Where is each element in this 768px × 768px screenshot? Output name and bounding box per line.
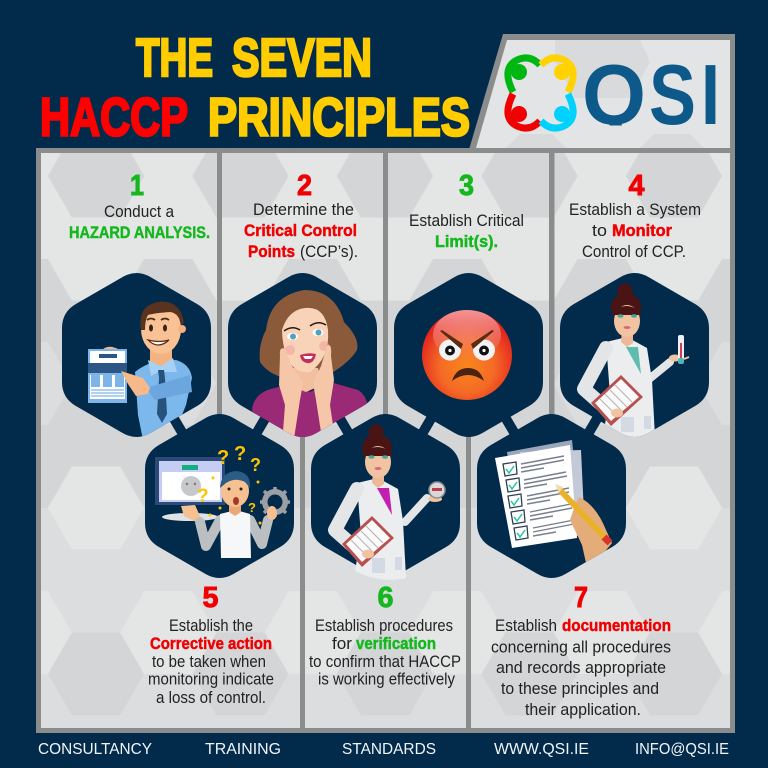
monitor — [155, 457, 225, 505]
document held by man — [88, 347, 127, 403]
title: HACCP — [40, 88, 188, 148]
principle 6 text: is working effectively — [318, 670, 455, 688]
footer: WWW.QSI.IE — [494, 741, 589, 758]
principle 2 text: Critical Control — [244, 221, 357, 240]
principle 1 text: HAZARD ANALYSIS. — [69, 223, 210, 242]
logo wordmark: Q — [582, 48, 646, 143]
doctor's coat — [355, 478, 406, 580]
footer: STANDARDS — [342, 741, 436, 758]
question marks: ? — [234, 443, 246, 465]
principle 5 text: 5 — [202, 582, 219, 614]
logo: four people ring — [508, 58, 573, 128]
man's pointing arm — [121, 371, 192, 400]
check marks — [506, 466, 525, 537]
hexagon 3: angry emoji — [394, 273, 543, 437]
principle 7 text: Establish — [495, 616, 557, 635]
logo wordmark — [585, 64, 716, 126]
question marks: ? — [248, 500, 256, 515]
hexagon 1: man holding document — [62, 273, 211, 440]
confused man's shirt — [220, 510, 251, 558]
doctor's teal shirt — [626, 347, 641, 374]
doctor's hand on clipboard — [611, 408, 623, 418]
footer — [38, 741, 729, 758]
angry mouth — [452, 368, 484, 381]
footer: CONSULTANCY — [38, 741, 152, 758]
man's tie — [157, 370, 167, 423]
doctor's neck and head — [611, 284, 641, 347]
question marks: ? — [197, 486, 209, 507]
question marks: ? — [250, 455, 261, 475]
angry eyebrows — [440, 330, 494, 349]
principle 6 text: verification — [356, 634, 436, 653]
man's face details — [147, 318, 169, 345]
checklist page — [495, 445, 577, 548]
doctor's pockets — [621, 416, 651, 432]
principle 7 text: 7 — [574, 582, 588, 614]
logo person: cyan — [541, 94, 573, 128]
gear — [260, 487, 290, 517]
plate under monitor — [162, 513, 218, 521]
doctor's hand on clipboard — [362, 550, 374, 558]
principle 5 text: a loss of control. — [156, 688, 266, 707]
hexagon 2: surprised woman — [228, 273, 377, 445]
woman's centre top stripe — [295, 400, 319, 437]
logo person: green — [508, 58, 540, 92]
principle 7 text: concerning all procedures — [491, 638, 671, 656]
principle 6 text: 6 — [378, 582, 394, 614]
title: THE — [136, 28, 213, 88]
doctor's pockets — [372, 557, 402, 573]
principle 2 text: (CCP’s). — [300, 242, 358, 261]
hexagon connectors — [170, 413, 601, 438]
principle 5 text: Establish the — [169, 616, 253, 635]
principle 2 text: Determine the — [253, 200, 354, 219]
logo person: red — [508, 94, 540, 128]
confused man's head — [220, 471, 250, 516]
logo person: yellow — [541, 58, 573, 92]
hexagon 5: confused man with monitor — [145, 414, 294, 578]
principle 5 text: monitoring indicate — [148, 670, 274, 688]
principle 6 text: Establish procedures — [315, 616, 453, 635]
woman's top — [252, 383, 367, 437]
doctor's clipboard — [591, 375, 643, 426]
logo wordmark: S — [649, 48, 696, 143]
principle 7 text: documentation — [562, 616, 671, 635]
hexagon 6: doctor with stopwatch — [311, 414, 460, 580]
principle 4 text — [569, 170, 701, 261]
principle 7 text: their application. — [525, 700, 641, 719]
principle 1 text: 1 — [130, 170, 144, 202]
principle 3 text: 3 — [459, 170, 474, 202]
woman's face — [282, 308, 328, 372]
principle 1 text — [69, 170, 210, 242]
angry eyes — [439, 340, 495, 360]
principle 7 text: to these principles and — [501, 679, 659, 698]
principle 2 text: Points — [248, 242, 295, 261]
principle 6 text: for — [332, 634, 352, 653]
woman's neck — [293, 368, 319, 392]
principle 5 text: Corrective action — [150, 634, 272, 653]
principle 4 text: Monitor — [612, 221, 672, 240]
doctor's left arm — [584, 348, 610, 412]
man's hair — [140, 302, 184, 330]
man's shirt — [135, 360, 192, 440]
doctor's neck and head — [362, 424, 392, 488]
doctor's right arm — [405, 498, 427, 522]
doctor's clipboard — [342, 516, 394, 567]
principle 4 text: Control of CCP. — [582, 242, 686, 261]
principle 4 text: to — [592, 221, 607, 240]
doctor's left arm — [335, 489, 361, 553]
doctor's right arm — [648, 362, 670, 380]
checklist lines — [521, 456, 574, 536]
principle 3 text: Limit(s). — [435, 232, 498, 251]
title: SEVEN — [232, 28, 372, 88]
doctor's magenta shirt — [377, 488, 392, 515]
logo wordmark: I — [701, 48, 720, 143]
principle 3 text: Establish Critical — [409, 211, 524, 230]
footer: TRAINING — [205, 741, 281, 758]
question marks: ? — [217, 447, 229, 469]
doctor's coat — [604, 337, 655, 439]
stopwatch and hand — [428, 482, 445, 502]
footer: INFO@QSI.IE — [635, 741, 729, 758]
woman's face details — [284, 323, 329, 363]
principle 4 text: Establish a System — [569, 200, 701, 219]
title — [40, 28, 470, 148]
woman's hands and arms — [279, 345, 334, 436]
hand under monitor — [181, 505, 200, 522]
checkboxes — [503, 462, 528, 540]
panel: principles frame — [36, 148, 735, 733]
panel: logo — [468, 34, 735, 153]
confused man's arms — [200, 520, 268, 546]
man's head — [141, 312, 181, 354]
principle 2 text: 2 — [297, 170, 312, 202]
writing hand — [570, 497, 612, 572]
principle 1 text: Conduct a — [104, 202, 174, 221]
principle 7 text: and records appropriate — [496, 658, 666, 677]
hexagon 7: checklist and hand with pencil — [477, 414, 626, 578]
principle 5 text: to be taken when — [152, 652, 266, 671]
title: PRINCIPLES — [208, 88, 470, 148]
hand holding gear — [267, 506, 277, 520]
angry face — [422, 310, 512, 400]
pencil — [555, 484, 610, 543]
principle 3 text — [409, 170, 524, 251]
principle 4 text: 4 — [628, 170, 645, 202]
principle 5 text — [148, 582, 274, 707]
principle 6 text — [309, 582, 461, 688]
back sheets — [507, 440, 585, 545]
question marks — [198, 446, 260, 512]
yellow sparkle dots — [208, 476, 262, 524]
hexagon 4: doctor with thermometer — [560, 273, 709, 439]
principle 6 text: to confirm that HACCP — [309, 652, 461, 671]
doctor's hand and thermometer — [669, 335, 689, 364]
principle 2 text — [244, 170, 358, 261]
principle 7 text — [491, 582, 671, 719]
woman's hair — [260, 290, 357, 378]
man's neck and collar — [150, 350, 172, 366]
